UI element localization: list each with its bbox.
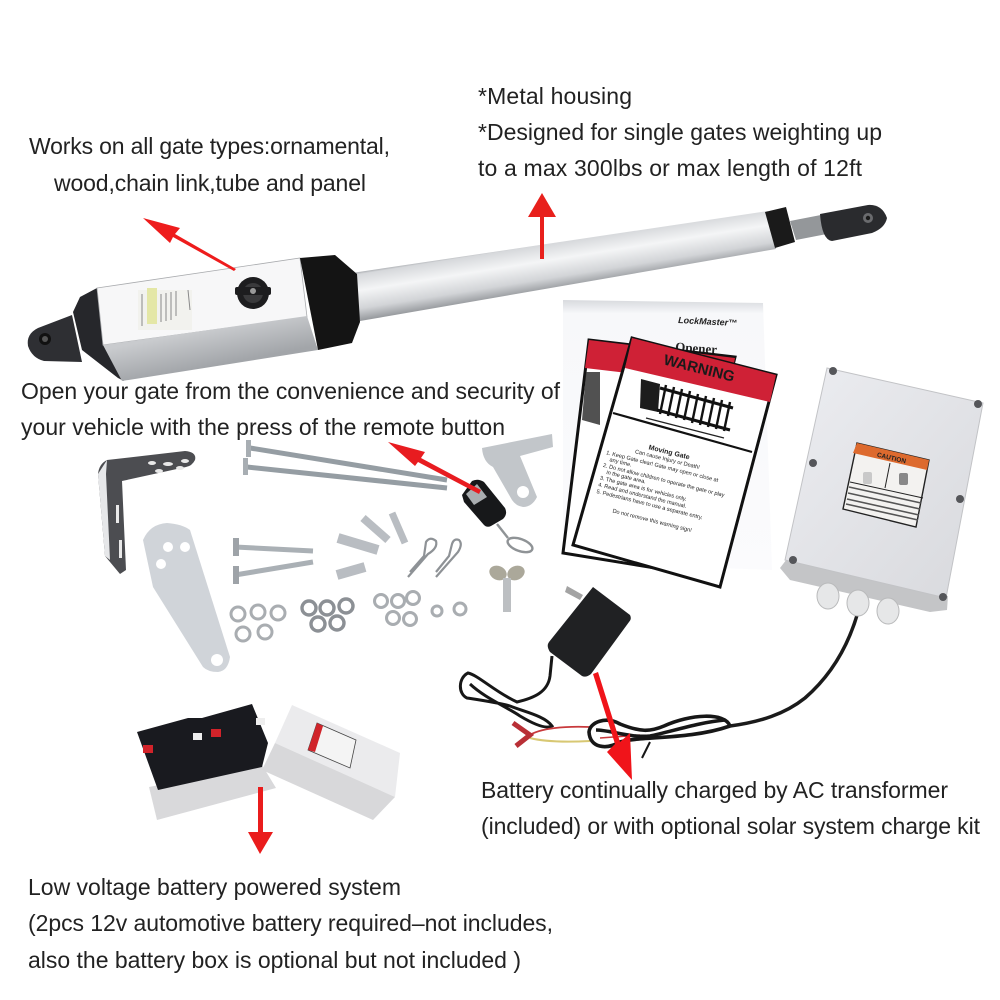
sheet instructions: 3. The gate area is for vehicles only. xyxy=(599,475,688,503)
sheet instructions: 4. Read and understand the manual. xyxy=(597,482,687,510)
warning sheet rear xyxy=(563,340,735,568)
clevis pins xyxy=(337,513,405,575)
key switch xyxy=(235,277,271,309)
box lid xyxy=(785,368,983,598)
motor housing upper xyxy=(97,258,307,345)
actuator rod xyxy=(790,214,832,240)
cable from box xyxy=(730,612,858,726)
charger prongs xyxy=(565,586,583,600)
text: metal housing: to a max 300lbs or max length of 12ft xyxy=(478,155,863,181)
manual back page xyxy=(563,300,772,570)
plate bracket xyxy=(143,523,230,672)
motor housing lower xyxy=(103,316,318,381)
battery and box xyxy=(137,704,400,820)
cotter pins xyxy=(408,539,461,577)
warning text: WARNING xyxy=(662,352,736,386)
text: battery: (2pcs 12v automotive battery required–not includes, xyxy=(28,910,553,936)
short bolts xyxy=(233,538,313,584)
text: transformer: Battery continually charged by AC transformer xyxy=(481,777,948,803)
arrow: to gate text xyxy=(143,218,236,271)
actuator end clamp xyxy=(765,207,795,248)
sheet rule xyxy=(613,413,752,452)
warning banner xyxy=(625,338,776,402)
text: remote: Open your gate from the convenience and security of xyxy=(21,378,561,404)
sheet instructions: Do not remove this warning sign! xyxy=(612,509,693,534)
sheet instructions: any time. xyxy=(609,457,633,469)
sheet instructions: 5. Pedestrians have to use a separate entry. xyxy=(596,489,704,521)
arrow: battery xyxy=(248,787,273,854)
screws xyxy=(789,367,982,601)
actuator clevis xyxy=(820,205,887,241)
housing label xyxy=(138,288,192,330)
control box xyxy=(730,367,983,726)
hex nuts xyxy=(302,599,353,631)
sheet instructions: 2. Do not allow children to operate the gate or play xyxy=(602,463,725,499)
cable stub xyxy=(642,742,650,758)
text: metal housing xyxy=(478,83,882,181)
text: remote xyxy=(21,378,561,440)
box base xyxy=(149,765,276,820)
lid label xyxy=(308,723,356,768)
text: gate types: Works on all gate types:ornamental, xyxy=(29,133,390,159)
cable glands xyxy=(817,583,899,624)
text: battery: Low voltage battery powered system xyxy=(28,874,401,900)
gate picture xyxy=(640,379,733,438)
text: metal housing: *Designed for single gates weighting up xyxy=(478,119,882,145)
text: battery xyxy=(28,874,553,973)
text: metal housing: *Metal housing xyxy=(478,83,632,109)
manual sheets xyxy=(563,300,776,587)
arrow: charger xyxy=(593,672,632,780)
box base xyxy=(780,555,948,612)
text: battery: also the battery box is optional but not included ) xyxy=(28,947,521,973)
text: remote: your vehicle with the press of the remote button xyxy=(21,414,505,440)
washers xyxy=(231,592,466,641)
small bracket xyxy=(482,434,553,507)
text: transformer xyxy=(481,777,981,839)
battery terminals xyxy=(143,718,265,753)
wing key xyxy=(487,563,527,612)
sheet instructions xyxy=(592,435,732,540)
arrow: remote xyxy=(388,442,481,494)
sheet instructions: Can cause Injury or Death! xyxy=(634,449,701,471)
coiled cable xyxy=(589,716,730,747)
L bracket xyxy=(98,451,195,574)
sheet instructions: Moving Gate xyxy=(648,444,690,461)
motor housing end cap xyxy=(73,288,124,381)
manual title: Opener xyxy=(675,339,718,357)
text: gate types: wood,chain link,tube and panel xyxy=(53,170,366,196)
battery box lid top xyxy=(275,705,400,797)
remote xyxy=(462,480,534,555)
actuator tube xyxy=(352,211,776,321)
black collar xyxy=(300,255,360,350)
charger low voltage cord xyxy=(460,656,552,727)
rear mount xyxy=(28,315,82,362)
manual brand: LockMaster™ xyxy=(678,315,737,328)
arrow: to housing text xyxy=(528,193,556,259)
batteries xyxy=(137,704,268,790)
caution label: CAUTION xyxy=(876,452,907,465)
sheet instructions: in the gate area. xyxy=(606,470,647,486)
charger body xyxy=(548,587,631,677)
battery box lid side xyxy=(262,743,395,820)
text: transformer: (included) or with optional solar system charge kit xyxy=(481,813,981,839)
actuator xyxy=(28,205,887,381)
charger xyxy=(460,586,730,758)
sheet instructions: 1. Keep Gate clear! Gate may open or close at xyxy=(605,450,719,484)
plate holes xyxy=(156,542,223,666)
warning sheet front xyxy=(573,338,776,587)
long bolts xyxy=(243,440,447,488)
caution label xyxy=(843,443,929,527)
text: gate types xyxy=(29,133,390,196)
red and yellow leads xyxy=(513,723,640,746)
